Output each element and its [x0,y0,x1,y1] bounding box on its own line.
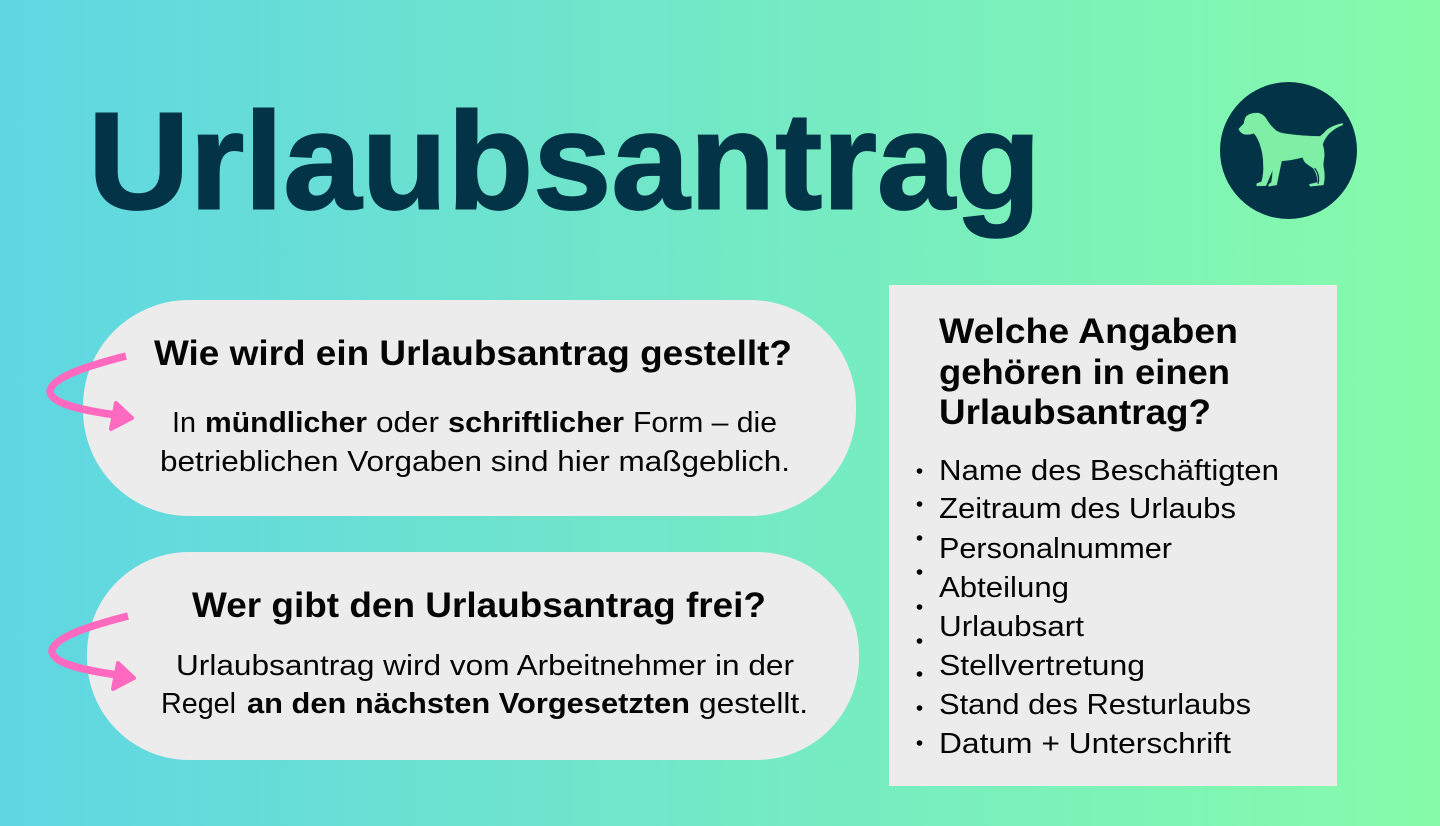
text block: panel 1 body: mündlicher [205,407,367,439]
text block: panel 1 body: In [172,407,196,439]
heading: Welche Angaben: Welche Angaben [939,312,1238,351]
panel: Wer gibt den Urlaubsantrag frei [87,552,859,760]
list of details: Urlaubsart [939,611,1084,643]
list of details [939,455,1279,760]
list of details: Personalnummer [939,533,1172,565]
list of details: Datum + Unterschrift [939,728,1231,760]
text block: panel 1 body: oder [376,407,439,439]
icon: dog in circle [1220,82,1357,219]
panel: Wie wird ein Urlaubsantrag gestellt [83,300,856,516]
heading: panel 2: Wer gibt den Urlaubsantrag frei? [192,586,766,625]
bullets [917,468,922,746]
title: Urlaubsantrag [88,84,1041,238]
panel: Welche Angaben [889,285,1337,786]
text block: panel 1 body: Form – die [633,407,777,439]
heading: Welche Angaben [939,312,1238,432]
text block: panel 1 body: schriftlicher [448,407,624,439]
text block: panel 2 body: Urlaubsantrag wird vom Arbeitnehmer in der [176,650,794,682]
text block: panel 2 body [161,650,808,720]
arrow: panel 1 [50,356,132,429]
heading: panel 1: Wie wird ein Urlaubsantrag gestellt? [154,334,792,373]
heading: Welche Angaben: Urlaubsantrag? [939,393,1211,432]
text block: panel 2 body: an den nächsten Vorgesetzten [247,688,690,720]
list of details: Stellvertretung [939,650,1145,682]
text block: panel 1 body: betrieblichen Vorgaben sind hier maßgeblich. [160,446,790,478]
list of details: Zeitraum des Urlaubs [939,493,1236,525]
list of details: Abteilung [939,572,1069,604]
list of details: Stand des Resturlaubs [939,689,1251,721]
arrow: panel 2 [52,616,134,689]
heading: Welche Angaben: gehören in einen [939,353,1230,392]
text block: panel 2 body: gestellt. [699,688,808,720]
text block: panel 1 body [160,407,790,478]
list of details: Name des Beschäftigten [939,455,1279,487]
text block: panel 2 body: Regel [161,688,236,720]
